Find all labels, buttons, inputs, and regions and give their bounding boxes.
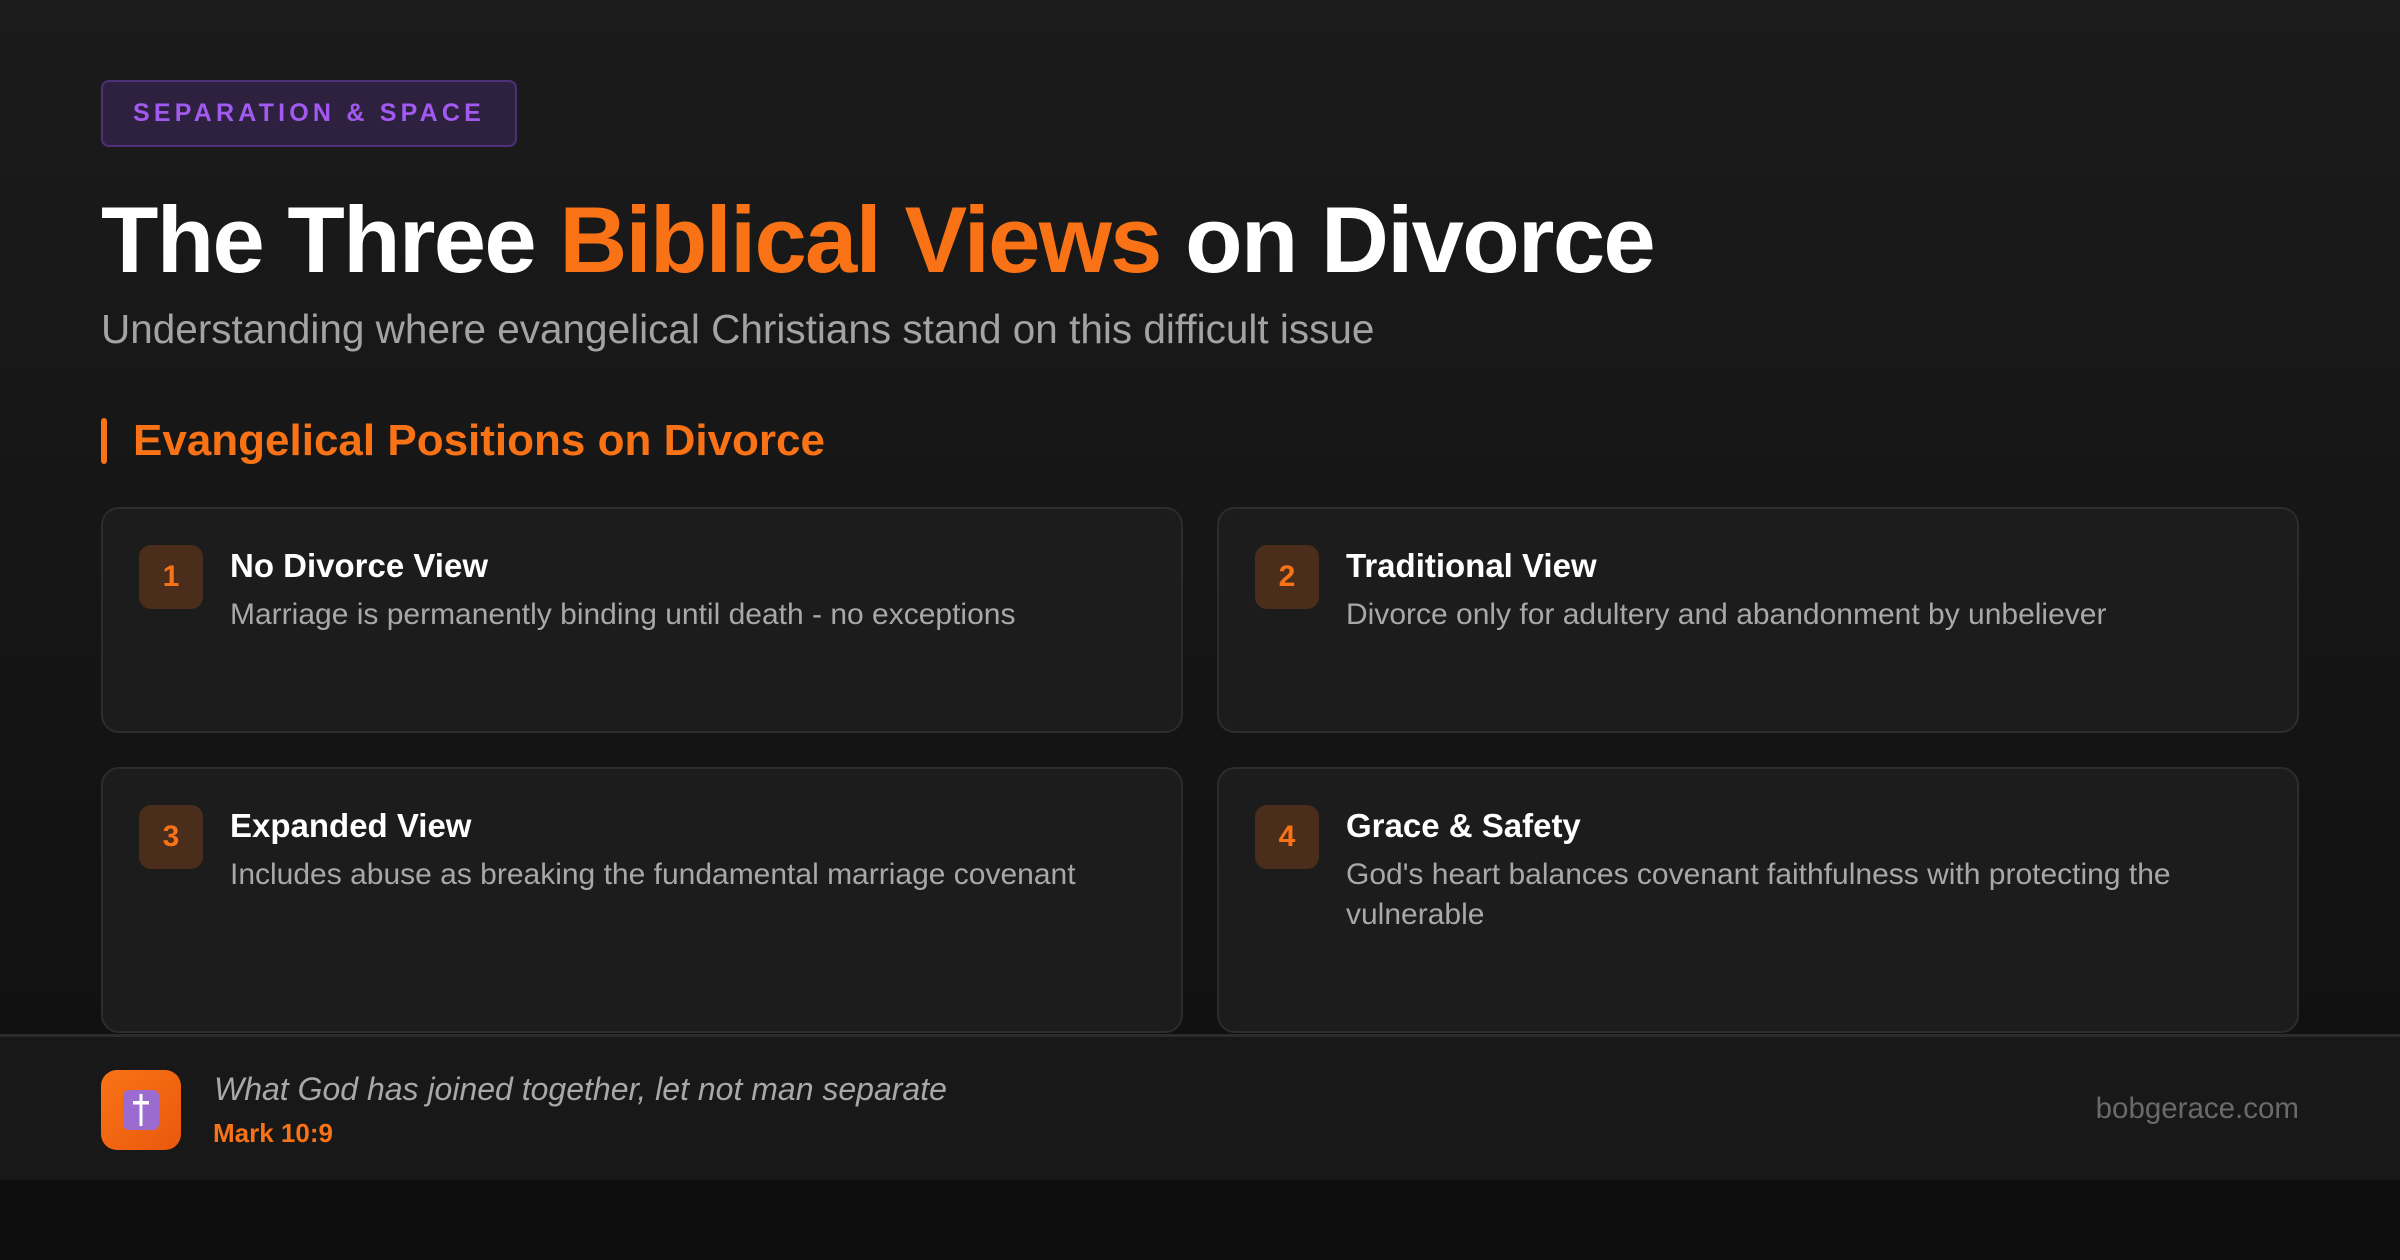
card title: Expanded View <box>230 807 471 844</box>
number badge 3 <box>139 805 203 869</box>
scripture reference: Mark 10:9 <box>213 1118 333 1148</box>
number badge 4 <box>1255 805 1319 869</box>
title: The Three Biblical Views on Divorce <box>101 187 1654 292</box>
section heading <box>101 416 825 465</box>
quote: What God has joined together, let not man separate <box>214 1071 947 1107</box>
subtitle: Understanding where evangelical Christians stand on this difficult issue <box>101 306 1374 352</box>
card description: Includes abuse as breaking the fundamental marriage covenant <box>230 858 1076 891</box>
card: no divorce view <box>101 507 1183 733</box>
card title: No Divorce View <box>230 547 488 584</box>
number badge 3: 3 <box>163 820 179 853</box>
card title: Traditional View <box>1346 547 1597 584</box>
icon: cross <box>101 1070 181 1150</box>
badge: separation & space <box>101 80 517 147</box>
card description: Divorce only for adultery and abandonment by unbeliever <box>1346 598 2106 631</box>
card description: God's heart balances covenant faithfulness with protecting the vulnerable <box>1346 858 2171 931</box>
site url: bobgerace.com <box>2096 1092 2299 1125</box>
number badge 4: 4 <box>1279 820 1295 853</box>
number badge 1: 1 <box>163 560 179 593</box>
number badge 2 <box>1255 545 1319 609</box>
card description: Marriage is permanently binding until death - no exceptions <box>230 598 1015 631</box>
number badge 2: 2 <box>1279 560 1295 593</box>
text: Evangelical Positions on Divorce <box>133 416 825 465</box>
card: expanded view <box>101 767 1183 1033</box>
card: traditional view <box>1217 507 2299 733</box>
badge: separation & space: SEPARATION & SPACE <box>133 99 485 127</box>
number badge 1 <box>139 545 203 609</box>
card: grace & safety <box>1217 767 2299 1033</box>
card title: Grace & Safety <box>1346 807 1581 844</box>
footer <box>0 1034 2400 1180</box>
